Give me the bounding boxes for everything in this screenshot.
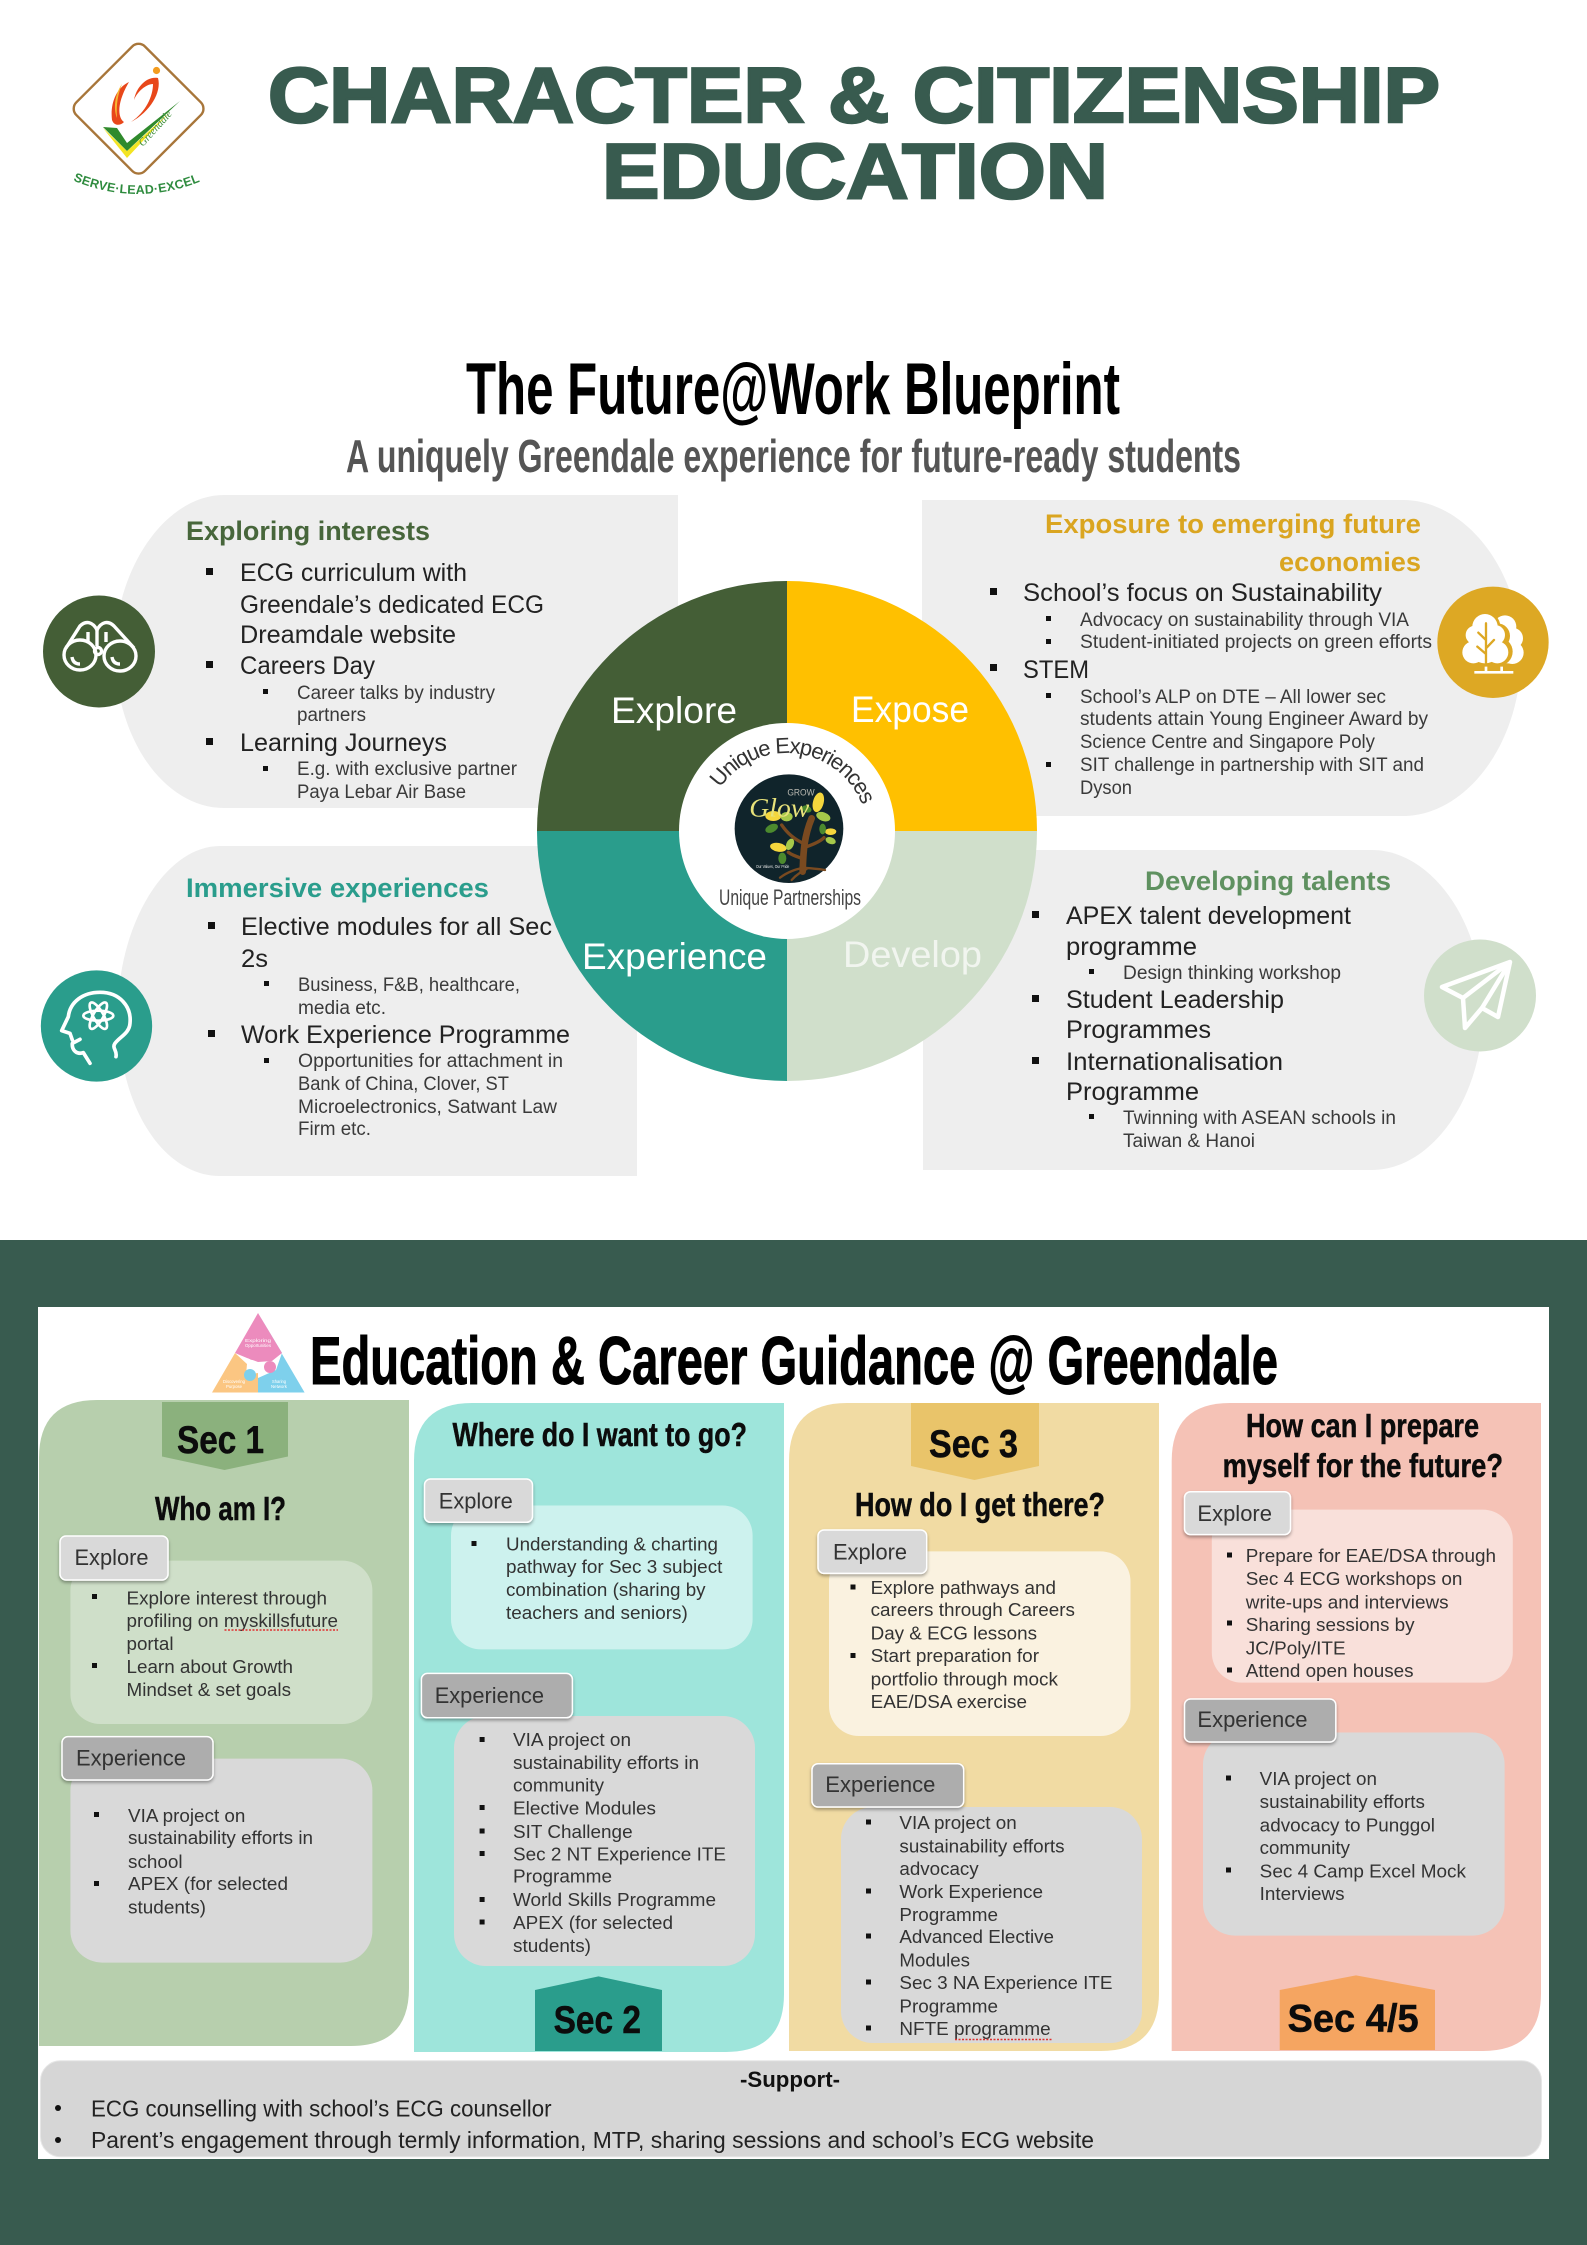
experience card	[812, 1764, 1142, 2043]
segment: explore	[537, 581, 787, 831]
explore card: portal	[126, 1633, 174, 1654]
panel: exploring interests: Careers Day	[240, 652, 375, 680]
explore card: Explore pathways and	[871, 1577, 1056, 1598]
explore card	[60, 1536, 372, 1724]
panel: developing talents: APEX talent development	[1066, 902, 1351, 930]
explore card: Explore	[1197, 1501, 1272, 1526]
experience card: Experience	[1197, 1707, 1308, 1732]
panel: support: Parent’s engagement through termly information, MTP, sharing sessions and school’s ECG website	[91, 2127, 1094, 2153]
experience card: Advanced Elective	[899, 1926, 1054, 1947]
panel: exploring interests: E.g. with exclusive partner	[297, 759, 518, 780]
experience card: Programme	[513, 1866, 612, 1887]
panel: exploring interests: Greendale’s dedicated ECG	[240, 591, 544, 619]
panel: developing talents: Taiwan & Hanoi	[1123, 1131, 1255, 1152]
panel: exposure to emerging future economies: Dyson	[1080, 778, 1132, 799]
experience card: sustainability efforts	[899, 1835, 1065, 1856]
column: sec 1: Sec 1	[177, 1419, 264, 1462]
label: experience: Experience	[582, 936, 767, 977]
panel: exposure to emerging future economies: School’s focus on Sustainability	[1023, 579, 1383, 607]
panel: developing talents	[923, 850, 1483, 1170]
icon: grow glow tree: GROW	[787, 788, 815, 798]
panel: developing talents: Developing talents	[1145, 866, 1391, 896]
experience card: VIA project on	[1260, 1768, 1377, 1789]
explore card: Explore	[439, 1489, 513, 1514]
panel: immersive experiences: 2s	[241, 945, 268, 973]
question: how can I prepare myself	[1223, 1407, 1503, 1484]
experience card: students)	[513, 1935, 591, 1956]
panel: immersive experiences: Immersive experiences	[186, 873, 489, 903]
question: how can I prepare myself: How can I prepare	[1246, 1407, 1479, 1444]
question: how do I get there: How do I get there?	[855, 1486, 1105, 1523]
column: sec 2	[414, 1403, 784, 2052]
panel: exploring interests: partners	[297, 705, 366, 726]
main title: EDUCATION	[602, 127, 1108, 215]
experience card: World Skills Programme	[513, 1889, 716, 1910]
panel: immersive experiences: Bank of China, Clover, ST	[298, 1074, 509, 1095]
circular diagram	[537, 581, 1037, 1081]
explore card: Sharing sessions by	[1246, 1614, 1415, 1635]
icon: paper plane	[1424, 940, 1536, 1052]
experience card: Experience	[435, 1683, 544, 1708]
column: sec 2: Sec 2	[554, 1999, 641, 2042]
school logo: SERVE·LEAD·EXCEL	[74, 174, 200, 194]
experience card: advocacy to Punggol	[1260, 1814, 1435, 1836]
school logo	[72, 42, 205, 194]
explore card: write-ups and interviews	[1245, 1592, 1449, 1613]
experience card	[1184, 1699, 1505, 1936]
panel: developing talents: Programmes	[1066, 1016, 1211, 1044]
panel: exposure to emerging future economies: Science Centre and Singapore Poly	[1080, 732, 1375, 753]
experience card: students)	[128, 1897, 206, 1918]
icon: puzzle pyramid: Exploring	[245, 1338, 272, 1343]
experience card: sustainability efforts in	[128, 1827, 313, 1848]
panel: developing talents: programme	[1066, 933, 1197, 961]
experience card: Work Experience	[899, 1881, 1043, 1902]
experience card: advocacy	[899, 1858, 979, 1879]
explore card: Start preparation for	[871, 1645, 1039, 1666]
arc text: unique experiences: Unique Experiences	[709, 738, 872, 804]
explore card: Day & ECG lessons	[871, 1623, 1037, 1644]
column: sec 3: Sec 3	[929, 1423, 1018, 1466]
icon: grow glow tree: Our Values, Our Pride	[756, 864, 790, 869]
explore card: Attend open houses	[1246, 1660, 1414, 1681]
experience card: school	[128, 1851, 183, 1872]
experience card: APEX (for selected	[513, 1912, 673, 1933]
icon: grow glow tree: Glow	[749, 794, 810, 823]
tab: sec 1	[162, 1402, 288, 1470]
panel: exposure to emerging future economies: students attain Young Engineer Award by	[1080, 709, 1428, 730]
panel: exploring interests: ECG curriculum with	[240, 559, 467, 587]
experience card: Sec 4 Camp Excel Mock	[1260, 1860, 1467, 1881]
icon: trees	[1437, 587, 1549, 698]
experience card: Modules	[899, 1950, 970, 1971]
experience card: Sec 2 NT Experience ITE	[513, 1844, 726, 1865]
panel: immersive experiences: Elective modules for all Sec	[241, 913, 552, 941]
explore card: Mindset & set goals	[126, 1679, 291, 1700]
experience card: Experience	[76, 1746, 186, 1771]
panel: developing talents: Twinning with ASEAN schools in	[1123, 1108, 1396, 1129]
explore card: Explore	[74, 1545, 148, 1570]
panel: immersive experiences: Work Experience Programme	[241, 1021, 570, 1049]
explore card: Prepare for EAE/DSA through	[1246, 1545, 1496, 1566]
icon: head with atom	[41, 970, 152, 1082]
explore card: pathway for Sec 3 subject	[506, 1556, 722, 1577]
icon: grow glow tree	[735, 774, 843, 883]
main title: CHARACTER & CITIZENSHIP	[268, 51, 1440, 139]
column: sec 4/5	[1172, 1403, 1541, 2051]
panel: exposure to emerging future economies: STEM	[1023, 656, 1089, 684]
explore card: teachers and seniors)	[506, 1602, 688, 1623]
explore card: careers through Careers	[871, 1599, 1075, 1620]
question: where do I want to go: Where do I want to go?	[452, 1416, 747, 1453]
text: unique partnerships: Unique Partnerships	[719, 885, 861, 910]
experience card: Experience	[825, 1772, 935, 1797]
experience card: Interviews	[1260, 1883, 1345, 1904]
panel: exposure to emerging future economies: Advocacy on sustainability through VIA	[1080, 610, 1409, 631]
experience card: community	[513, 1775, 605, 1796]
panel: immersive experiences: Firm etc.	[298, 1119, 371, 1140]
tab: sec 3	[911, 1403, 1039, 1480]
experience card: Programme	[899, 1904, 998, 1925]
explore card: JC/Poly/ITE	[1246, 1638, 1346, 1658]
experience card: community	[1260, 1837, 1351, 1858]
column: sec 4/5: Sec 4/5	[1288, 1998, 1419, 2040]
explore card: combination (sharing by	[506, 1579, 706, 1600]
panel: immersive experiences: Opportunities for attachment in	[298, 1051, 563, 1072]
experience card: Elective Modules	[513, 1798, 656, 1819]
panel: developing talents: Design thinking workshop	[1123, 963, 1341, 984]
experience card: sustainability efforts	[1260, 1791, 1425, 1812]
question: who am I: Who am I?	[155, 1490, 286, 1527]
experience card: VIA project on	[899, 1812, 1017, 1833]
explore card: Sec 4 ECG workshops on	[1246, 1568, 1462, 1589]
explore card: Understanding & charting	[506, 1533, 718, 1554]
panel: exposure to emerging future economies: SIT challenge in partnership with SIT and	[1080, 755, 1424, 776]
centre white circle	[679, 723, 895, 939]
icon: puzzle pyramid: Network	[271, 1384, 288, 1389]
question: how can I prepare myself: myself for the future?	[1223, 1447, 1503, 1484]
icon: puzzle pyramid: Opportunities	[245, 1343, 272, 1348]
section: dark green background	[0, 1240, 1587, 2245]
segment: develop	[787, 831, 1037, 1081]
column: sec 1	[39, 1400, 409, 2046]
experience card: SIT Challenge	[513, 1821, 633, 1842]
tab: sec 4/5	[1280, 1975, 1435, 2050]
panel: developing talents: Student Leadership	[1066, 986, 1284, 1014]
label: develop: Develop	[843, 934, 982, 975]
panel: exploring interests: Learning Journeys	[240, 729, 447, 757]
icon: puzzle pyramid	[212, 1313, 305, 1392]
panel: developing talents: Internationalisation	[1066, 1048, 1283, 1076]
icon: puzzle pyramid: Purpose	[226, 1384, 242, 1389]
panel: support	[40, 2061, 1542, 2157]
explore card: profiling on myskillsfuture	[126, 1610, 338, 1631]
explore card: Learn about Growth	[126, 1656, 293, 1677]
column: sec 3	[789, 1403, 1159, 2051]
experience card: VIA project on	[128, 1805, 245, 1826]
school logo: Greendale	[136, 108, 175, 149]
experience card: NFTE programme	[899, 2018, 1051, 2039]
segment: expose	[787, 581, 1037, 831]
explore card	[424, 1479, 753, 1649]
experience card: VIA project on	[513, 1729, 631, 1750]
explore card: Explore interest through	[126, 1588, 327, 1608]
label: explore: Explore	[611, 690, 737, 731]
experience card	[62, 1737, 372, 1963]
panel: exploring interests	[115, 495, 678, 808]
experience card: sustainability efforts in	[513, 1752, 699, 1773]
panel: exposure to emerging future economies: economies	[1279, 547, 1421, 577]
panel: exploring interests: Paya Lebar Air Base	[297, 782, 466, 803]
experience card: Programme	[899, 1996, 998, 2017]
panel: immersive experiences	[118, 846, 637, 1176]
explore card: Explore	[833, 1540, 907, 1565]
panel: exposure to emerging future economies	[922, 500, 1521, 816]
panel: exploring interests: Career talks by industry	[297, 683, 495, 704]
blueprint heading: The Future@Work Blueprint	[466, 349, 1120, 430]
panel: immersive experiences: media etc.	[298, 998, 386, 1019]
experience card	[421, 1673, 755, 1966]
explore card	[818, 1530, 1130, 1736]
icon: binoculars	[43, 596, 155, 708]
panel: exploring interests: Dreamdale website	[240, 621, 456, 649]
tab: sec 2	[535, 1976, 662, 2051]
explore card: EAE/DSA exercise	[871, 1691, 1027, 1712]
panel: exposure to emerging future economies: Exposure to emerging future	[1045, 509, 1421, 539]
explore card: portfolio through mock	[871, 1669, 1059, 1690]
explore card	[1184, 1492, 1513, 1683]
panel: developing talents: Programme	[1066, 1078, 1199, 1106]
label: expose: Expose	[851, 689, 969, 730]
panel: immersive experiences: Business, F&B, healthcare,	[298, 975, 520, 996]
main title	[268, 51, 1440, 215]
panel: support: ECG counselling with school’s ECG counsellor	[91, 2096, 552, 2122]
panel: white ECG board	[38, 1307, 1549, 2159]
experience card: APEX (for selected	[128, 1873, 288, 1894]
panel: support: -Support-	[740, 2067, 840, 2092]
panel: immersive experiences: Microelectronics, Satwant Law	[298, 1097, 557, 1118]
icon: puzzle pyramid: Discovering	[223, 1379, 245, 1384]
experience card: Sec 3 NA Experience ITE	[899, 1972, 1112, 1993]
panel: exploring interests: Exploring interests	[186, 516, 430, 546]
segment: experience	[537, 831, 787, 1081]
panel: exposure to emerging future economies: Student-initiated projects on green efforts	[1080, 632, 1432, 653]
icon: puzzle pyramid: Sharing	[272, 1379, 286, 1384]
panel: exposure to emerging future economies: School’s ALP on DTE – All lower sec	[1080, 687, 1386, 708]
